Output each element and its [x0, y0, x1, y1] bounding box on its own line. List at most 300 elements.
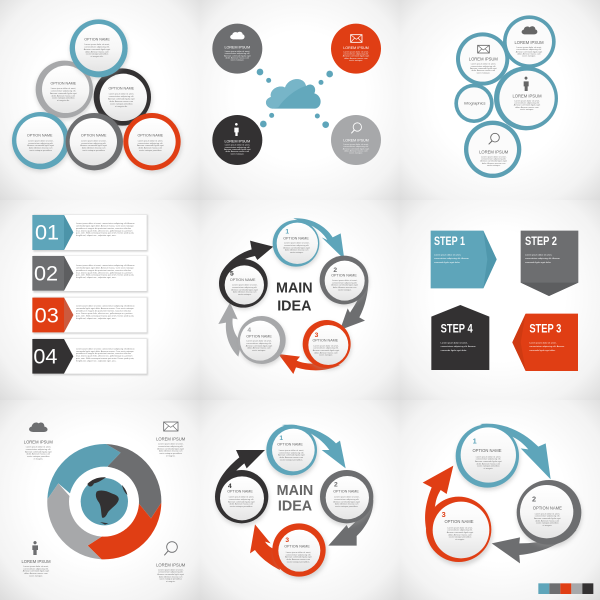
step 2 tag — [521, 231, 578, 296]
row 04: 04 — [33, 343, 57, 368]
ring: black option: Aenean commodo ligula eget — [108, 98, 135, 101]
step ring 2: OPTION NAME — [333, 489, 359, 493]
row 03: commodo ligula eget dolor. Aenean massa. Cum sociis natoque — [76, 307, 135, 310]
ring: orange option: OPTION NAME — [138, 133, 164, 137]
heading: main idea: IDEA — [278, 499, 312, 515]
step ring 2: Lorem ipsum dolor sit amet, — [535, 513, 560, 515]
ring: bottom teal option: dolor. Aenean massa cum — [29, 147, 53, 150]
step 2 tag: consectetuer adipiscing elit. Aenean — [525, 257, 561, 260]
item: cloud: et magnis. — [34, 457, 43, 460]
arrow 1: teal — [293, 218, 344, 259]
step ring 4: sociis natoque. — [252, 349, 266, 352]
item: mail: LOREM IPSUM — [156, 437, 186, 442]
step 3 tag — [512, 314, 578, 371]
ring: light gray option — [36, 61, 94, 120]
panel: step tags — [431, 231, 578, 371]
row 02: fringilla vel, aliquet nec, vulputate eget, arcu. — [76, 276, 117, 279]
circle: light gray with magnifier: consectetuer adipiscing elit. — [343, 145, 369, 148]
circle: orange with mail — [331, 24, 381, 74]
row 04: Lorem ipsum dolor sit amet, consectetuer adipiscing elit. Aenean — [76, 348, 134, 350]
step ring 2: dolor. Aenean massa cum — [335, 503, 359, 506]
row 03: 03 — [35, 302, 59, 327]
step ring 5: consectetuer adipiscing elit. — [232, 286, 258, 289]
bubble: mail: LOREM IPSUM — [469, 57, 498, 62]
circle: light gray with magnifier: Aenean commodo ligula eget — [343, 147, 370, 150]
item: cloud: Lorem ipsum dolor sit amet, — [26, 447, 51, 449]
row 01: mus. Donec quam felis, ultricies nec, pellentesque eu, pretium — [76, 229, 133, 232]
panel: globe donut — [21, 422, 186, 583]
bubble: mail: Lorem ipsum dolor sit amet, — [471, 64, 496, 66]
step ring 4: consectetuer adipiscing elit. — [229, 498, 254, 501]
step ring 1: sociis natoque penatibus — [477, 465, 500, 468]
step ring 2: Aenean commodo ligula eget — [333, 500, 360, 503]
item: magnifier: dolor. Aenean massa cum — [159, 575, 183, 578]
step ring 3: consectetuer adipiscing elit. — [313, 347, 339, 350]
circle: light gray with magnifier: LOREM IPSUM — [343, 139, 369, 143]
step ring 2 — [320, 470, 374, 526]
arrow 2: gray — [340, 280, 368, 330]
step 3 tag: Lorem ipsum dolor sit amet, — [529, 342, 556, 344]
step ring 3: sociis natoque penatibus. — [287, 560, 310, 563]
bubble: person — [494, 66, 558, 130]
step ring 1: Lorem ipsum dolor sit amet, — [279, 450, 304, 452]
circle: black with person: LOREM IPSUM — [225, 139, 250, 143]
step ring 2: 2 — [334, 482, 338, 489]
step ring 1: sociis natoque penatibus. — [280, 458, 303, 461]
bubble: cloud: dolor. Aenean massa cum — [517, 52, 541, 55]
item: person — [21, 541, 51, 577]
step ring 2: sociis natoque. — [338, 288, 352, 291]
step ring 1: OPTION NAME — [472, 448, 502, 453]
circle: orange with mail: LOREM IPSUM — [343, 46, 369, 50]
circle: orange with mail: consectetuer adipiscing elit. — [343, 52, 369, 55]
row 02: 02 — [34, 261, 58, 286]
item: cloud: Aenean commodo ligula eget — [25, 450, 52, 453]
step ring 2: sociis natoque penatibus — [536, 522, 559, 525]
step ring 1: Lorem ipsum dolor sit amet, — [284, 243, 309, 245]
ring: dark gray option: consectetuer adipiscing elit. — [81, 142, 107, 145]
item: mail: et magnis. — [166, 454, 176, 457]
arrow 4: light gray — [218, 303, 242, 357]
ring: bottom teal option: sociis natoque penatibus — [29, 149, 52, 152]
step ring 5: OPTION NAME — [230, 278, 256, 282]
step 3 tag: STEP 3 — [529, 322, 561, 336]
step ring 2: et magnis. — [543, 524, 552, 527]
step 4 tag: consectetuer adipiscing elit. Aenean — [441, 345, 476, 348]
heading: main idea: IDEA — [277, 298, 311, 314]
item: cloud: sociis natoque penatibus — [27, 455, 50, 458]
ring: bottom teal option: Lorem ipsum dolor sit amet, — [28, 140, 53, 142]
bubble: infographics — [454, 84, 494, 123]
item: mail: Lorem ipsum dolor sit amet, — [158, 444, 183, 446]
item: mail: dolor. Aenean massa cum — [159, 450, 183, 453]
row 03: Lorem ipsum dolor sit amet, consectetuer adipiscing elit. Aenean — [76, 306, 134, 308]
ring: light gray option: Aenean commodo ligula eget — [50, 92, 77, 95]
ring: dark gray option: Aenean commodo ligula eget — [80, 144, 107, 147]
circle: black with person — [212, 115, 262, 165]
step ring 5: Aenean commodo ligula eget — [231, 288, 258, 291]
circle: orange with mail: sociis natoque. — [349, 59, 363, 62]
arrow 1: teal — [480, 424, 551, 479]
step ring 1: OPTION NAME — [283, 236, 309, 240]
step ring 1 — [456, 424, 520, 490]
item: person: dolor. Aenean massa cum — [24, 572, 48, 575]
step ring 2: consectetuer adipiscing elit. — [332, 281, 358, 284]
ring: dark gray option: sociis natoque penatibus — [82, 149, 105, 152]
row 04 — [32, 338, 148, 375]
ring: light gray option: sociis natoque penatibus — [52, 97, 75, 100]
panel: pyramid of option rings — [12, 19, 182, 173]
item: mail — [156, 422, 186, 457]
ring: dark gray option: Lorem ipsum dolor sit amet, — [81, 140, 106, 142]
item: magnifier: consectetuer adipiscing elit. — [158, 571, 184, 574]
bubble: person: LOREM IPSUM — [512, 93, 542, 98]
step ring 3: Lorem ipsum dolor sit amet, — [447, 527, 473, 529]
step 4 tag: commodo ligula eget dolor. — [441, 349, 467, 352]
ring: orange option: Lorem ipsum dolor sit amet, — [138, 140, 163, 142]
row 02: penatibus et magnis dis parturient montes, nascetur ridiculus — [76, 269, 131, 272]
row 04: penatibus et magnis dis parturient montes, nascetur ridiculus — [76, 352, 131, 355]
step ring 3: consectetuer adipiscing elit. — [286, 553, 311, 556]
step ring 3: OPTION NAME — [444, 519, 474, 524]
step ring 3: Lorem ipsum dolor sit amet, — [313, 345, 339, 347]
ring: black option: et magnis dis. — [115, 105, 128, 108]
bubble: person: consectetuer adipiscing elit. — [514, 101, 540, 104]
arrow 5: black — [221, 241, 273, 275]
item: magnifier: sociis natoque penatibus — [159, 578, 182, 581]
step ring 2: Lorem ipsum dolor sit amet, — [332, 280, 357, 282]
item: magnifier: et magnis. — [166, 580, 176, 583]
circle: orange with mail: dolor. Aenean massa cum — [344, 57, 368, 60]
arrow 2: gray — [328, 500, 373, 546]
step ring 2: OPTION NAME — [533, 505, 562, 510]
step ring 4: 4 — [247, 327, 251, 334]
step 1 tag: STEP 1 — [434, 234, 465, 248]
heading: main idea — [276, 281, 313, 314]
step 4 tag: STEP 4 — [441, 322, 473, 336]
circle: gray with cloud — [212, 24, 262, 74]
item: magnifier — [156, 542, 186, 583]
step ring 4: OPTION NAME — [227, 489, 253, 493]
ring: black option: sociis natoque penatibus — [110, 102, 133, 105]
ring: orange option: consectetuer adipiscing elit. — [138, 142, 163, 145]
step ring 3: sociis natoque. — [319, 354, 333, 357]
step ring 3: 3 — [285, 537, 289, 544]
step ring 1: dolor. Aenean massa cum — [280, 456, 303, 459]
bubble: person: Lorem ipsum dolor sit amet, — [514, 100, 540, 102]
step 1 tag: consectetuer adipiscing elit. Aenean — [434, 257, 470, 260]
item: magnifier: LOREM IPSUM — [156, 562, 186, 567]
ring: orange option: sociis natoque penatibus — [139, 149, 162, 152]
ring: top teal option — [70, 19, 129, 79]
row 02: mus. Donec quam felis, ultricies nec, pellentesque eu, pretium — [76, 271, 133, 274]
arrow 3: orange — [423, 466, 453, 528]
ring: light gray option: dolor. Aenean massa cum — [52, 94, 75, 97]
item: cloud: LOREM IPSUM — [24, 440, 53, 445]
step ring 1: 1 — [285, 228, 289, 235]
item: person: LOREM IPSUM — [21, 559, 51, 564]
bubble: person: sociis natoque. — [520, 108, 534, 111]
step ring 1: Lorem ipsum dolor sit amet, — [476, 456, 501, 458]
step ring 2 — [320, 256, 369, 306]
step ring 2: sociis natoque penatibus. — [335, 505, 359, 508]
item: person: Aenean commodo ligula eget — [23, 570, 50, 573]
heading: main idea: MAIN — [276, 281, 313, 297]
row 03: penatibus et magnis dis parturient montes, nascetur ridiculus — [76, 310, 131, 313]
step ring 1: et magnis. — [484, 467, 493, 470]
ring: black option — [94, 68, 152, 128]
step ring 2: Aenean commodo ligula eget — [534, 517, 561, 520]
arrow 4: black — [216, 450, 265, 490]
step ring 3 — [272, 523, 327, 579]
step ring 3: Lorem ipsum dolor sit amet, — [286, 552, 311, 554]
bubble: cloud: Aenean commodo ligula eget — [516, 50, 543, 53]
panel: four-step cycle — [215, 425, 374, 579]
row 01: fringilla vel, aliquet nec, vulputate eget, arcu. — [76, 234, 117, 237]
circle: black with person: dolor. Aenean massa cum — [226, 150, 249, 153]
step ring 3: consectetuer adipiscing elit. — [447, 529, 473, 532]
row 01: Lorem ipsum dolor sit amet, consectetuer adipiscing elit. Aenean — [76, 223, 134, 225]
row 04: quis, sem. Nulla consequat massa quis enim. Donec pede justo, — [76, 357, 135, 360]
step ring 1: consectetuer adipiscing elit. — [476, 458, 501, 461]
ring: top teal option: sociis natoque penatibus — [86, 53, 108, 56]
step ring 3 — [303, 320, 351, 370]
step ring 3 — [426, 497, 493, 565]
circle: gray with cloud: consectetuer adipiscing elit. — [225, 52, 250, 55]
panel: numbered list — [32, 215, 148, 375]
step 1 tag: Lorem ipsum dolor sit amet, — [434, 254, 461, 256]
item: cloud: consectetuer adipiscing elit. — [26, 448, 51, 451]
step ring 4 — [238, 316, 286, 366]
step 4 tag — [431, 305, 489, 370]
circle: light gray with magnifier: sociis natoque. — [349, 152, 363, 155]
step ring 1: Aenean commodo ligula eget — [278, 454, 305, 457]
item: magnifier: Aenean commodo ligula eget — [157, 573, 184, 576]
step ring 1: consectetuer adipiscing elit. — [284, 244, 310, 247]
ring: bottom teal option: Aenean commodo ligula eget — [27, 144, 54, 147]
row 02: quis, sem. Nulla consequat massa quis enim. Donec pede justo, — [76, 274, 135, 277]
arrow 1: teal — [282, 425, 346, 468]
step ring 3: et magnis. — [455, 538, 465, 541]
row 02 — [32, 256, 148, 293]
step ring 4: dolor. Aenean massa cum — [247, 347, 271, 350]
step ring 3: Aenean commodo ligula eget — [313, 349, 340, 352]
ring: orange option: Aenean commodo ligula eget — [137, 144, 164, 147]
step ring 3: OPTION NAME — [313, 339, 339, 343]
item: magnifier: Lorem ipsum dolor sit amet, — [158, 569, 183, 571]
step 1 tag: commodo ligula eget dolor. — [434, 261, 461, 264]
ring: bottom teal option: consectetuer adipiscing elit. — [28, 142, 54, 145]
circle: orange with mail: Aenean commodo ligula eget — [343, 55, 370, 58]
item: mail: sociis natoque penatibus — [159, 452, 182, 455]
arrow 3: orange — [278, 354, 340, 374]
colour swatches — [538, 583, 593, 594]
panel: five-step cycle — [218, 218, 369, 374]
step ring 5: sociis natoque. — [238, 293, 252, 296]
bubble: cloud: LOREM IPSUM — [514, 40, 544, 45]
step ring 2: consectetuer adipiscing elit. — [334, 498, 360, 501]
ring: orange option: dolor. Aenean massa cum — [139, 147, 162, 150]
step ring 1: 1 — [473, 436, 477, 445]
row 04: mus. Donec quam felis, ultricies nec, pellentesque eu, pretium — [76, 355, 133, 358]
bubble: search: LOREM IPSUM — [479, 149, 509, 154]
circle: gray with cloud: Aenean commodo ligula eget — [224, 54, 251, 57]
row 01: commodo ligula eget dolor. Aenean massa. Cum sociis natoque — [76, 224, 135, 227]
ring: bottom teal option: OPTION NAME — [27, 133, 53, 137]
arrow 2: gray — [492, 530, 577, 563]
step ring 3: dolor. Aenean massa cum — [448, 533, 472, 536]
circle: black with person: Lorem ipsum dolor sit amet, — [225, 145, 250, 147]
circle: light gray with magnifier: dolor. Aenean massa cum — [344, 149, 368, 152]
ring: light gray option: et magnis dis. — [57, 99, 70, 102]
step 4 tag: Lorem ipsum dolor sit amet, — [441, 342, 468, 344]
row 01: quis, sem. Nulla consequat massa quis enim. Donec pede justo, — [76, 232, 135, 235]
bubble: mail: dolor. Aenean massa cum — [472, 69, 495, 72]
item: cloud — [24, 423, 53, 460]
ring: light gray option: Lorem ipsum dolor sit amet, — [51, 88, 76, 90]
bubble: mail: consectetuer adipiscing elit. — [471, 65, 496, 68]
row 04: fringilla vel, aliquet nec, vulputate eget, arcu. — [76, 359, 117, 362]
globe — [81, 477, 128, 525]
step ring 2: Lorem ipsum dolor sit amet, — [334, 497, 359, 499]
row 03 — [32, 297, 148, 334]
icon: central cloud — [266, 79, 321, 110]
step 2 tag: commodo ligula eget dolor. — [525, 261, 552, 264]
step ring 1 — [273, 220, 320, 269]
step ring 3: dolor. Aenean massa cum — [314, 351, 338, 354]
step 1 tag — [431, 231, 497, 288]
step ring 3: 3 — [442, 510, 446, 519]
circle: gray with cloud: Lorem ipsum dolor sit amet, — [225, 51, 250, 53]
step 2 tag: STEP 2 — [525, 234, 557, 248]
circle: orange with mail: Lorem ipsum dolor sit amet, — [343, 51, 369, 53]
heading: main idea: MAIN — [277, 483, 313, 499]
row 03: fringilla vel, aliquet nec, vulputate eget, arcu. — [76, 317, 117, 320]
step ring 2: 2 — [333, 267, 337, 274]
bubble: mail: sociis natoque. — [477, 71, 491, 74]
step ring 1: Aenean commodo ligula eget — [475, 460, 502, 463]
ring: top teal option: OPTION NAME — [84, 37, 110, 41]
step ring 4: sociis natoque penatibus. — [230, 505, 253, 508]
bubble: search: consectetuer adipiscing elit. — [481, 157, 507, 160]
ring: black option: dolor. Aenean massa cum — [110, 100, 133, 103]
step ring 2: dolor. Aenean massa cum — [536, 519, 559, 522]
circle: gray with cloud: LOREM IPSUM — [225, 46, 250, 50]
step ring 1: Aenean commodo ligula eget — [283, 246, 310, 249]
step ring 4: consectetuer adipiscing elit. — [246, 342, 272, 345]
panel: teal bubble cluster — [454, 15, 558, 178]
step ring 4: OPTION NAME — [246, 334, 272, 338]
row 02: commodo ligula eget dolor. Aenean massa. Cum sociis natoque — [76, 266, 135, 269]
ring: light gray option: consectetuer adipiscing elit. — [51, 89, 76, 92]
item: mail: Aenean commodo ligula eget — [157, 447, 184, 450]
heading: main idea — [277, 483, 313, 515]
step ring 2: dolor. Aenean massa cum — [333, 286, 357, 289]
bubble: search: Lorem ipsum dolor sit amet, — [481, 156, 506, 158]
bubble: person: Aenean commodo ligula eget — [514, 104, 541, 107]
ring: top teal option: dolor. Aenean massa cum — [85, 50, 109, 53]
item: person: Lorem ipsum dolor sit amet, — [23, 566, 49, 568]
step ring 4: Aenean commodo ligula eget — [246, 344, 273, 347]
step ring 1: sociis natoque. — [290, 251, 304, 254]
bubble: search: dolor. Aenean massa cum — [482, 162, 506, 165]
step ring 2: OPTION NAME — [331, 273, 357, 277]
bubble: cloud — [503, 15, 556, 68]
circle: black with person: Aenean commodo ligula eget — [224, 148, 251, 151]
bubble: search: Aenean commodo ligula eget — [480, 160, 507, 163]
bubble: search: sociis natoque. — [487, 164, 501, 167]
step ring 5: 5 — [230, 271, 234, 278]
ring: top teal option: consectetuer adipiscing elit. — [84, 45, 110, 48]
row 03: quis, sem. Nulla consequat massa quis enim. Donec pede justo, — [76, 314, 135, 317]
step 3 tag: commodo ligula eget dolor. — [529, 349, 556, 352]
step ring 3: Aenean commodo ligula eget — [285, 556, 312, 559]
step ring 5: dolor. Aenean massa cum — [233, 291, 257, 294]
item: person: sociis natoque. — [29, 574, 43, 577]
ring: top teal option: et magnis dis. — [91, 55, 104, 58]
step ring 3: OPTION NAME — [284, 545, 310, 549]
step ring 1: dolor. Aenean massa cum — [285, 249, 309, 252]
step ring 4 — [215, 470, 269, 526]
bubble: cloud: consectetuer adipiscing elit. — [516, 48, 542, 51]
ring: top teal option: Lorem ipsum dolor sit amet, — [84, 44, 110, 46]
step ring 2: 2 — [532, 494, 536, 503]
bubble: cloud: sociis natoque. — [522, 55, 536, 58]
step ring 4: dolor. Aenean massa cum — [230, 503, 253, 506]
ring: dark gray option: OPTION NAME — [81, 133, 107, 137]
step ring 4: Aenean commodo ligula eget — [228, 500, 255, 503]
bubble: person: dolor. Aenean massa cum — [515, 106, 539, 109]
ring: orange option — [123, 113, 182, 173]
bubble: mail: Aenean commodo ligula eget — [470, 67, 497, 70]
step ring 3: dolor. Aenean massa cum — [287, 558, 310, 561]
circle: light gray with magnifier: Lorem ipsum dolor sit amet, — [343, 144, 369, 146]
circle: light gray with magnifier — [331, 115, 381, 165]
circle: black with person: sociis natoque. — [231, 152, 245, 155]
step ring 3: 3 — [315, 332, 319, 339]
step ring 5: Lorem ipsum dolor sit amet, — [232, 285, 257, 287]
step ring 3: sociis natoque penatibus — [449, 536, 471, 539]
panel: cloud with four circles — [212, 24, 381, 165]
row 01: 01 — [35, 220, 59, 245]
row 02: Lorem ipsum dolor sit amet, consectetuer adipiscing elit. Aenean — [76, 265, 134, 267]
ring: black option: consectetuer adipiscing elit. — [109, 95, 134, 98]
circle: gray with cloud: dolor. Aenean massa cum — [226, 56, 249, 59]
ring: light gray option: OPTION NAME — [51, 81, 77, 85]
step ring 1: consectetuer adipiscing elit. — [279, 451, 304, 454]
step ring 1: OPTION NAME — [277, 443, 303, 447]
item: person: consectetuer adipiscing elit. — [23, 567, 49, 570]
donut arrows — [47, 444, 161, 559]
arrow 3: orange — [250, 524, 280, 570]
row 04: commodo ligula eget dolor. Aenean massa. Cum sociis natoque — [76, 350, 135, 353]
connector dots — [257, 69, 333, 128]
bubble: mail — [456, 32, 509, 86]
step 3 tag: consectetuer adipiscing elit. Aenean — [529, 345, 565, 348]
circle: gray with cloud: sociis natoque. — [231, 59, 245, 62]
bubble: search — [464, 121, 521, 178]
step ring 1: 1 — [279, 435, 283, 442]
step ring 3: Aenean commodo ligula eget — [447, 531, 474, 534]
step ring 4: 4 — [228, 483, 232, 490]
step ring 1: dolor. Aenean massa cum — [477, 462, 500, 465]
step ring 4: Lorem ipsum dolor sit amet, — [246, 341, 272, 343]
item: mail: consectetuer adipiscing elit. — [158, 445, 184, 448]
ring: dark gray option — [66, 113, 124, 173]
step ring 5 — [219, 259, 268, 309]
step ring 2 — [517, 480, 582, 547]
row 01 — [32, 215, 148, 252]
